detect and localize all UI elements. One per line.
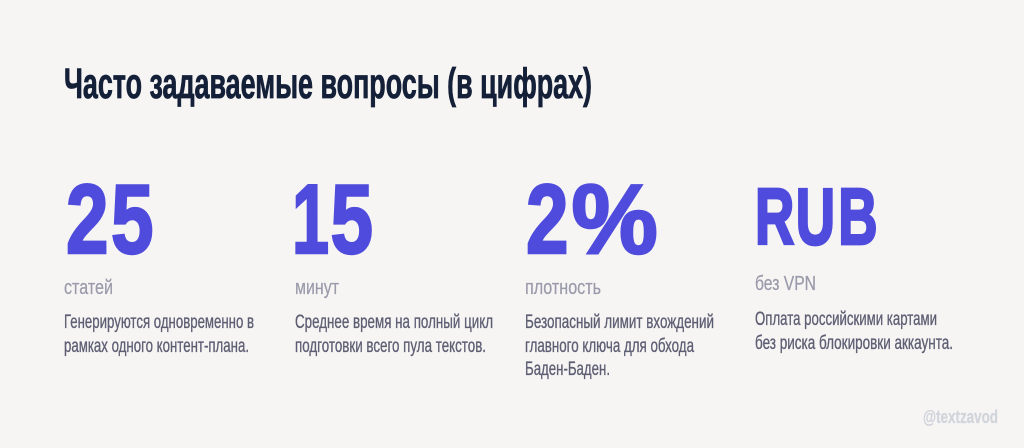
label: минут: минут: [295, 277, 339, 299]
label: статей: статей: [64, 277, 113, 299]
panel: 25 статей: [64, 164, 254, 357]
big number: 2%: 2: [526, 164, 569, 274]
label: без VPN: без VPN: [755, 273, 816, 295]
big number: 15: [292, 164, 373, 274]
big number: 2%: [526, 164, 658, 274]
big number: 2%: %: [572, 165, 658, 274]
panel: 15 минут: [292, 164, 493, 357]
description: плотность: Баден-Баден.: [525, 358, 610, 380]
label: плотность: плотность: [525, 277, 601, 299]
big number: 15: 5: [330, 164, 373, 274]
description: без VPN: Оплата российскими картами: [755, 308, 937, 330]
description: статей: Генерируются одновременно в: [64, 311, 254, 333]
big number: RUB: RUB: [755, 173, 878, 262]
description: минут: Среднее время на полный цикл: [295, 311, 493, 333]
big number: 15: 1: [292, 164, 329, 274]
description: статей: рамках одного контент-плана.: [64, 335, 249, 357]
description: плотность: главного ключа для обхода: [525, 335, 694, 357]
watermark: @textzavod: [923, 407, 998, 427]
panel: RUB без VPN: [755, 173, 953, 354]
description: плотность: Безопасный лимит вхождений: [525, 311, 714, 333]
description: минут: подготовки всего пула текстов.: [295, 335, 486, 357]
panel: 2% плотность: [525, 164, 714, 380]
title: Часто задаваемые вопросы (в цифрах): [64, 60, 592, 108]
big number: 25: 25: [66, 164, 154, 274]
